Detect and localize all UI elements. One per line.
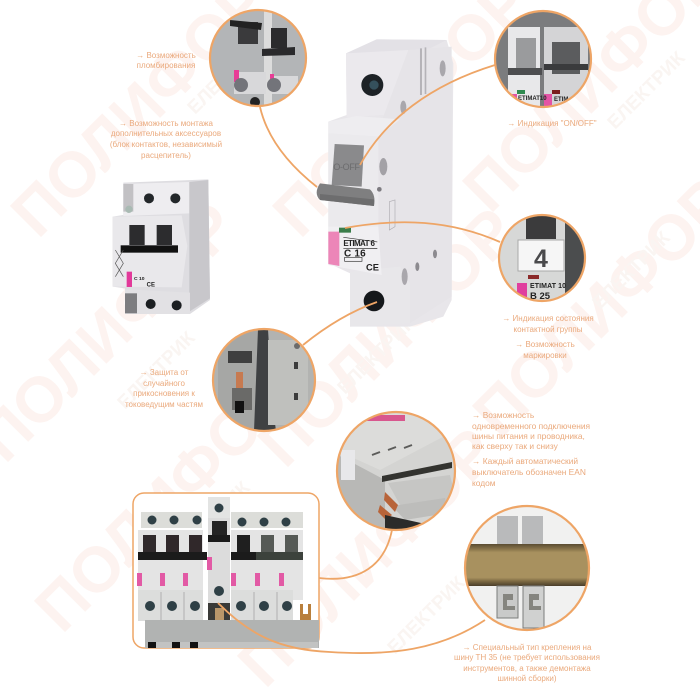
watermark: company logo pattern: ЕЛЕКТРИК bbox=[589, 227, 675, 314]
watermark: company logo pattern: ЕЛЕКТРИК bbox=[169, 477, 255, 564]
toggle lever bbox=[317, 144, 374, 206]
callout circle: DIN rail mount bbox=[465, 506, 589, 630]
callout circle: ON/OFF indication bbox=[495, 10, 591, 108]
callout circle: ON/OFF indication: ETIMAT10 bbox=[518, 96, 547, 102]
text: simultaneous connection: как сверху так и снизу bbox=[472, 441, 559, 451]
callout circle: ON/OFF indication: ETIM bbox=[554, 97, 568, 103]
callout circle: sealing bbox=[210, 10, 306, 107]
text: touch protection: → Защита от bbox=[140, 368, 189, 377]
callout circle: busbar connection bbox=[336, 411, 456, 531]
text: EAN code: выключатель обозначен EAN bbox=[472, 467, 586, 477]
text: accessory mounting: дополнительных аксессуаров bbox=[111, 129, 221, 138]
text: simultaneous connection: → Возможность bbox=[472, 410, 535, 420]
two-pole breaker: CE bbox=[147, 283, 155, 289]
callout circle: touch protection bbox=[213, 329, 315, 431]
text: accessory mounting: расцепитель) bbox=[141, 151, 191, 160]
text: marking: маркировки bbox=[523, 351, 567, 360]
callout circle: contact state and marking: B 25 bbox=[530, 291, 551, 302]
text: DIN rail mounting: шинной сборки) bbox=[498, 674, 557, 683]
callout circle: contact state and marking: 4 bbox=[534, 245, 548, 273]
connector line: busbar panel to rail mount bbox=[218, 603, 485, 653]
text: simultaneous connection: одновременного подключения bbox=[472, 421, 590, 431]
watermark: company logo pattern: ЕЛЕКТРИК bbox=[384, 572, 470, 659]
main single-pole breaker bbox=[317, 39, 453, 327]
text: touch protection: токоведущим частям bbox=[125, 400, 203, 409]
text: EAN code: → Каждый автоматический bbox=[472, 456, 578, 466]
two-pole breaker: C 10 bbox=[134, 276, 145, 282]
text: ON/OFF: → Индикация "ON/OFF" bbox=[507, 119, 597, 128]
watermark: company logo pattern: ЕЛЕКТРИК bbox=[604, 47, 690, 134]
product label: CE bbox=[366, 263, 379, 273]
watermark: company logo pattern: ПОЛИФОР bbox=[244, 194, 530, 480]
product label bbox=[328, 227, 382, 275]
product label: ETIMAT 6 bbox=[343, 239, 376, 248]
watermark: company logo pattern: ПОЛИФОР bbox=[224, 414, 510, 700]
text: DIN rail mounting: → Специальный тип крепления на bbox=[463, 643, 592, 652]
panel: assembled breakers on busbar bbox=[133, 493, 319, 648]
text: DIN rail mounting: шину ТН 35 (не требует использования bbox=[454, 653, 600, 662]
text: sealing: → Возможность bbox=[136, 51, 196, 60]
callout circle: contact state and marking bbox=[499, 215, 585, 302]
watermark: company logo pattern: ЕЛЕКТРИК bbox=[114, 327, 200, 414]
watermark: company logo pattern: ПОЛИФОР bbox=[21, 359, 307, 645]
text: accessory mounting: → Возможность монтажа bbox=[119, 119, 214, 128]
text: DIN rail mounting: инструментов, а также демонтажа bbox=[463, 664, 591, 673]
connector lines bbox=[260, 65, 500, 579]
toggle lever: O-OFF bbox=[333, 162, 360, 172]
text: contact state: контактной группы bbox=[514, 325, 583, 334]
text: sealing: пломбирования bbox=[137, 61, 195, 70]
two-pole breaker bbox=[113, 179, 210, 314]
text: simultaneous connection: шины питания и проводника, bbox=[472, 431, 585, 441]
text: touch protection: случайного bbox=[143, 379, 185, 388]
text: touch protection: прикосновения к bbox=[133, 389, 195, 398]
text: accessory mounting: (блок контактов, независимый bbox=[110, 140, 222, 149]
text: marking: → Возможность bbox=[515, 340, 575, 349]
text: contact state: → Индикация состояния bbox=[502, 314, 594, 323]
product label: C 16 bbox=[344, 249, 366, 260]
watermark: company logo pattern: ЕЛЕКТРИК bbox=[184, 32, 270, 119]
text: EAN code: кодом bbox=[472, 478, 496, 488]
callout circle: contact state and marking: ETIMAT 10 bbox=[530, 283, 566, 290]
watermark: company logo pattern: ЕЛЕКТРИК bbox=[334, 312, 420, 399]
